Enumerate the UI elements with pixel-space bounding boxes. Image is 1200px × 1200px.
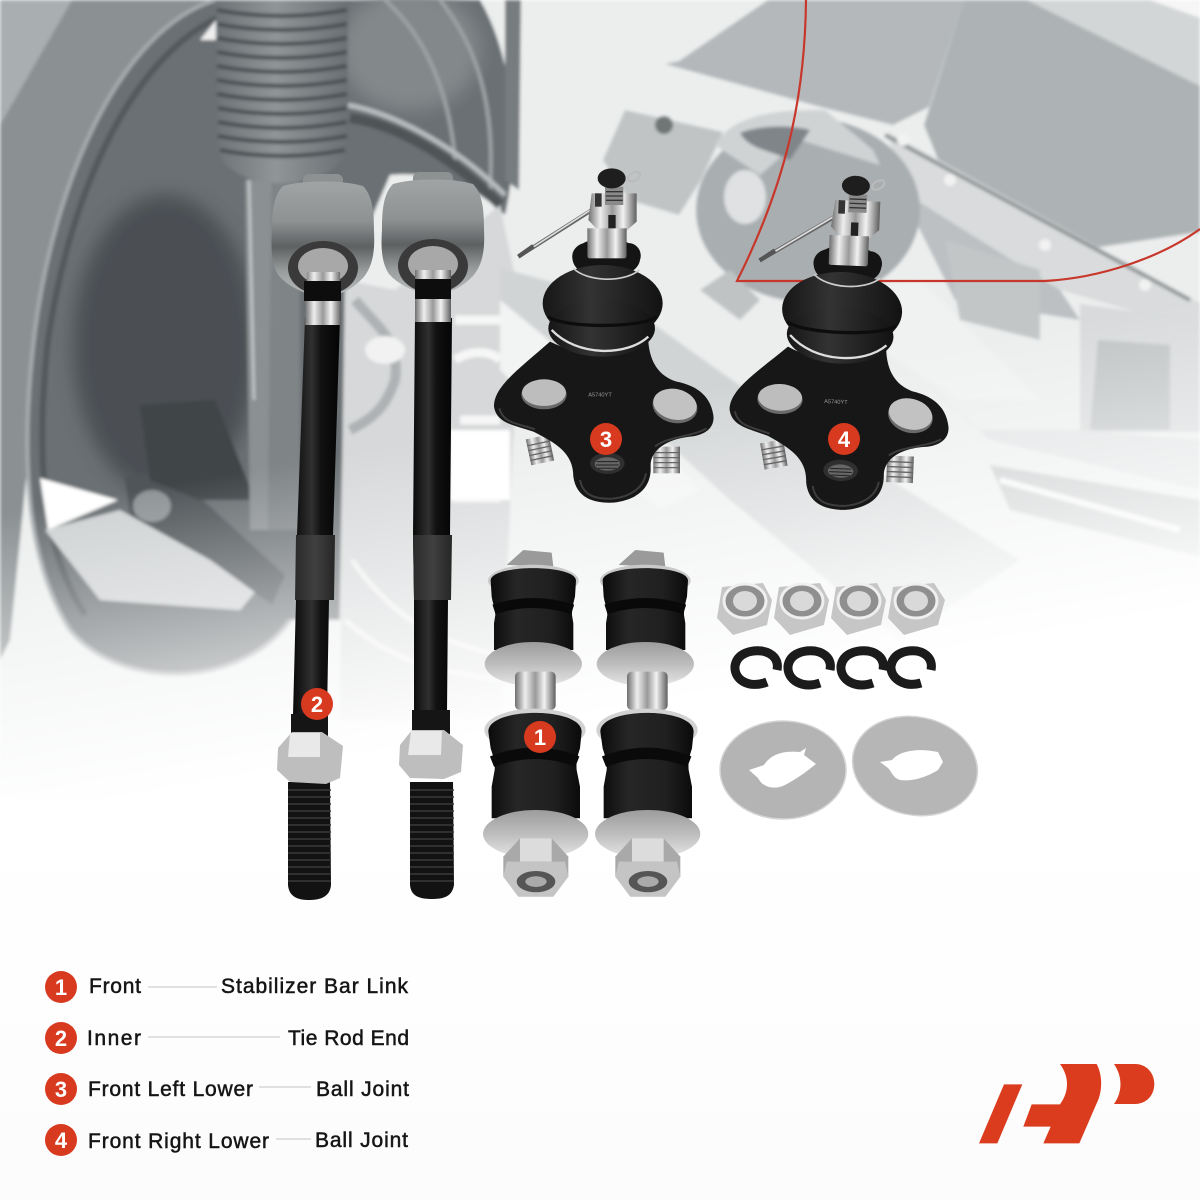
callout badge 4 [828,423,860,455]
tie rod left [272,174,374,900]
legend row 1: Stabilizer Bar Link [221,975,408,998]
callout badge 1 [524,721,556,753]
callout badge 4: 4 [838,427,851,452]
strut [245,180,272,530]
callout badge 1: 1 [534,725,546,750]
legend [45,971,409,1156]
callout badge 2 [301,688,333,720]
legend row 3 [45,1073,409,1105]
ball joint 4 [726,171,958,514]
hose [505,0,521,190]
callout badge 3 [590,423,622,455]
stabilizer link left [483,550,588,897]
upper right panels [665,0,964,125]
legend row 4: 4 [55,1128,68,1153]
wheel well [27,0,513,674]
stabilizer link right [595,550,700,897]
legend row 4 [45,1124,408,1156]
legend row 2: Inner [87,1027,141,1050]
arm and mount [603,110,723,215]
lower arm [500,268,1020,640]
legend row 2: Tie Rod End [288,1027,409,1050]
legend row 2 [45,1022,409,1054]
callout badge 2: 2 [311,692,323,717]
legend row 2: 2 [55,1026,67,1051]
silver area under tie rod heads [340,205,520,720]
strut bellows [216,0,348,183]
callout badge 3: 3 [600,427,612,452]
legend row 3: 3 [55,1077,67,1102]
legend row 4: Ball Joint [315,1129,408,1152]
tie rod right [382,172,484,899]
legend row 1 [45,971,408,1003]
legend row 1: Front [89,975,141,998]
white fades [0,200,1200,820]
legend row 1: 1 [55,975,67,1000]
legend row 3: Front Left Lower [88,1078,253,1101]
wheel gap, spoke and control arm [40,478,118,530]
lock washers [735,651,931,685]
locking disc left [720,721,846,819]
brand logo [979,1064,1154,1143]
cable [348,105,505,195]
red outline curve [737,0,1200,281]
tire sidewall and tread [0,0,230,660]
legend row 4: Front Right Lower [88,1130,269,1153]
ball joint 3 [494,168,714,503]
hex nuts [717,583,945,635]
legend row 3: Ball Joint [316,1078,409,1101]
locking disc right [843,705,987,827]
